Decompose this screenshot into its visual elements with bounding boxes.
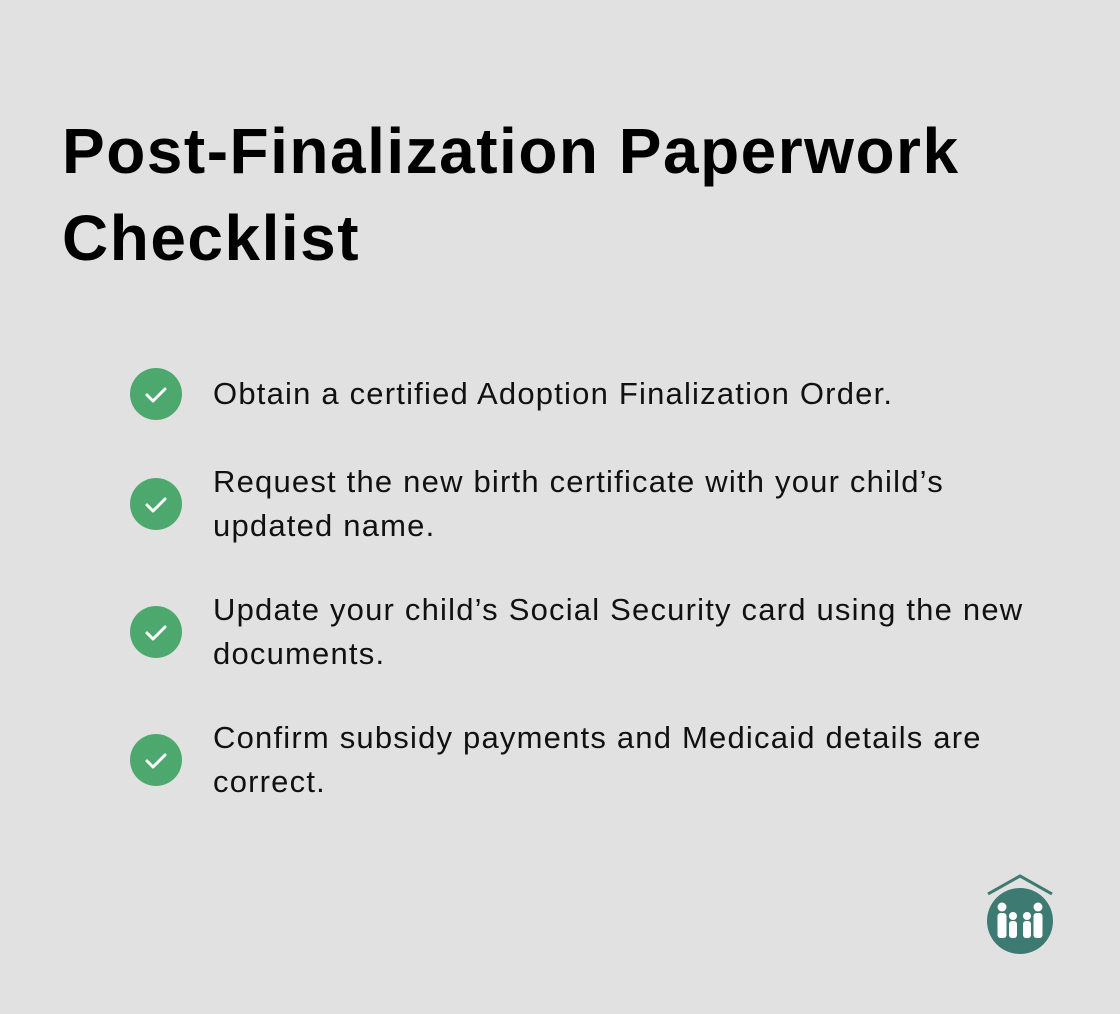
- text: [213, 464, 944, 543]
- checklist item 4: [130, 720, 982, 799]
- title: Checklist: [62, 202, 360, 274]
- checklist item 2: [130, 464, 944, 543]
- checklist item 3: [130, 592, 1023, 671]
- icon: check: [130, 368, 182, 420]
- text: Request the new birth certificate with your child’s: [213, 464, 944, 499]
- icon: check: [130, 734, 182, 786]
- text: [213, 720, 982, 799]
- text: [213, 592, 1023, 671]
- text: Update your child’s Social Security card using the new: [213, 592, 1023, 627]
- text: Confirm subsidy payments and Medicaid details are: [213, 720, 982, 755]
- text: updated name.: [213, 508, 435, 543]
- title: [62, 115, 960, 274]
- logo: [987, 874, 1053, 954]
- text: documents.: [213, 636, 385, 671]
- icon: check: [130, 606, 182, 658]
- checklist item 1: [130, 368, 893, 420]
- title: Post-Finalization Paperwork: [62, 115, 960, 187]
- text: Obtain a certified Adoption Finalization Order.: [213, 376, 893, 411]
- icon: check: [130, 478, 182, 530]
- text: correct.: [213, 764, 326, 799]
